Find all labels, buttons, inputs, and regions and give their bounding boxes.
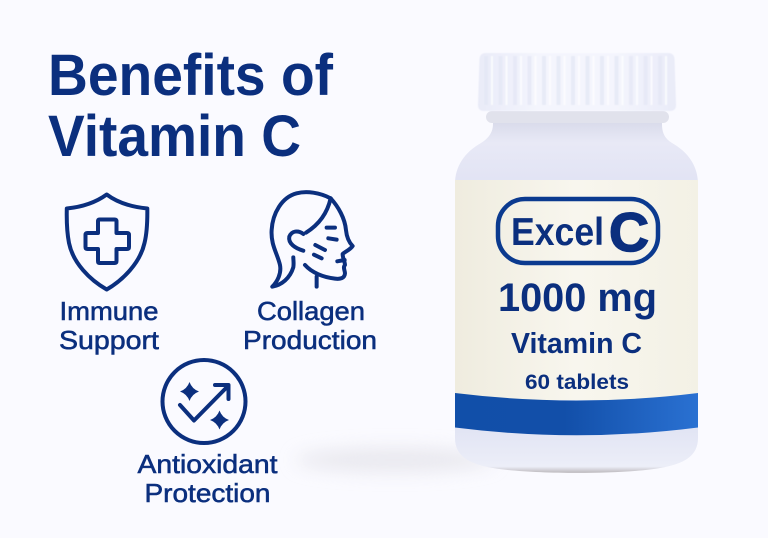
- benefit: immune support: [59, 194, 160, 355]
- label: collagen production: Production: [243, 325, 377, 355]
- cream label: [455, 180, 698, 400]
- dose: 1000 mg: [498, 276, 657, 320]
- count: 60 tablets: [525, 371, 629, 394]
- name: Vitamin C: [511, 328, 642, 360]
- label: immune support: Support: [59, 325, 160, 355]
- bottle base: [455, 420, 698, 473]
- logo: Excel C: Excel: [511, 211, 604, 254]
- label: antioxidant protection: Protection: [144, 478, 270, 508]
- icon: shield with cross: [67, 194, 147, 290]
- label: immune support: Immune: [60, 296, 158, 326]
- label: immune support: [59, 296, 160, 355]
- benefit: collagen production: [243, 192, 377, 355]
- icon: face profile: [272, 192, 353, 287]
- blue band: [455, 393, 698, 435]
- bottle neck ring: [486, 111, 669, 123]
- icon: circle with arrow and sparkles: [162, 360, 246, 443]
- label: antioxidant protection: Antioxidant: [138, 449, 278, 479]
- bottle cap: [478, 53, 676, 111]
- logo: Excel C: [498, 199, 658, 263]
- label: collagen production: [243, 296, 377, 355]
- title: [48, 43, 334, 169]
- label text: [498, 199, 658, 394]
- label: collagen production: Collagen: [257, 296, 365, 326]
- title: Vitamin C: [48, 104, 301, 169]
- bottle shoulder: [455, 118, 698, 200]
- bottle: [455, 53, 698, 473]
- logo: Excel C: C: [609, 201, 649, 263]
- bottle shadow: [295, 448, 495, 472]
- label: antioxidant protection: [138, 449, 278, 508]
- benefit: antioxidant protection: [138, 360, 278, 508]
- title: Benefits of: [48, 43, 334, 108]
